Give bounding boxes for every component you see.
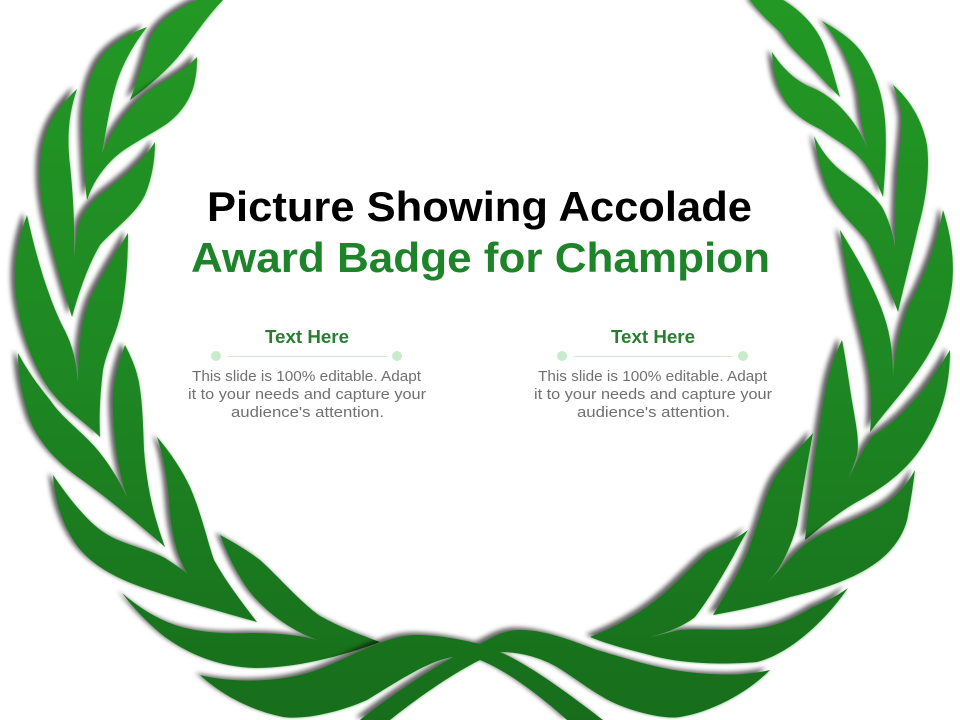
leaf pair: left second <box>40 89 155 317</box>
divider: left <box>211 351 402 361</box>
heading: right: Text Here <box>611 327 695 347</box>
leaf pair: right sixth <box>590 530 848 664</box>
leaf pair: left upper <box>83 27 197 200</box>
body: right: This slide is 100% editable. Adapt <box>538 369 767 385</box>
body: left: This slide is 100% editable. Adapt <box>192 369 421 385</box>
body: right: audience's attention. <box>577 405 730 421</box>
leaf pair: right second <box>814 85 928 312</box>
leaf: right top <box>750 0 840 97</box>
leaf: left top <box>130 0 223 100</box>
leaf pair: right upper <box>772 21 886 197</box>
leaf pair: right fourth <box>805 340 950 540</box>
text block: right <box>534 327 772 421</box>
body: left: it to your needs and capture your <box>188 387 426 403</box>
title line 2: Award Badge for Champion <box>191 234 770 281</box>
leaf pair: right fifth <box>713 433 915 615</box>
body: left <box>188 369 426 421</box>
body: right: it to your needs and capture your <box>534 387 772 403</box>
crossing ribbon stems <box>200 630 770 720</box>
divider: right <box>557 351 748 361</box>
body: right <box>534 369 772 421</box>
text block: left <box>188 327 426 421</box>
leaf pair: left fourth <box>18 345 165 547</box>
title line 1: Picture Showing Accolade <box>207 183 752 230</box>
heading: left: Text Here <box>265 327 349 347</box>
leaf pair: left third <box>15 215 128 437</box>
right laurel branch <box>590 0 953 664</box>
leaf pair: left fifth <box>53 437 257 622</box>
leaf pair: right third <box>840 210 953 432</box>
title <box>191 183 770 281</box>
left laurel branch <box>15 0 380 668</box>
leaf pair: left sixth <box>122 535 380 668</box>
body: left: audience's attention. <box>231 405 384 421</box>
